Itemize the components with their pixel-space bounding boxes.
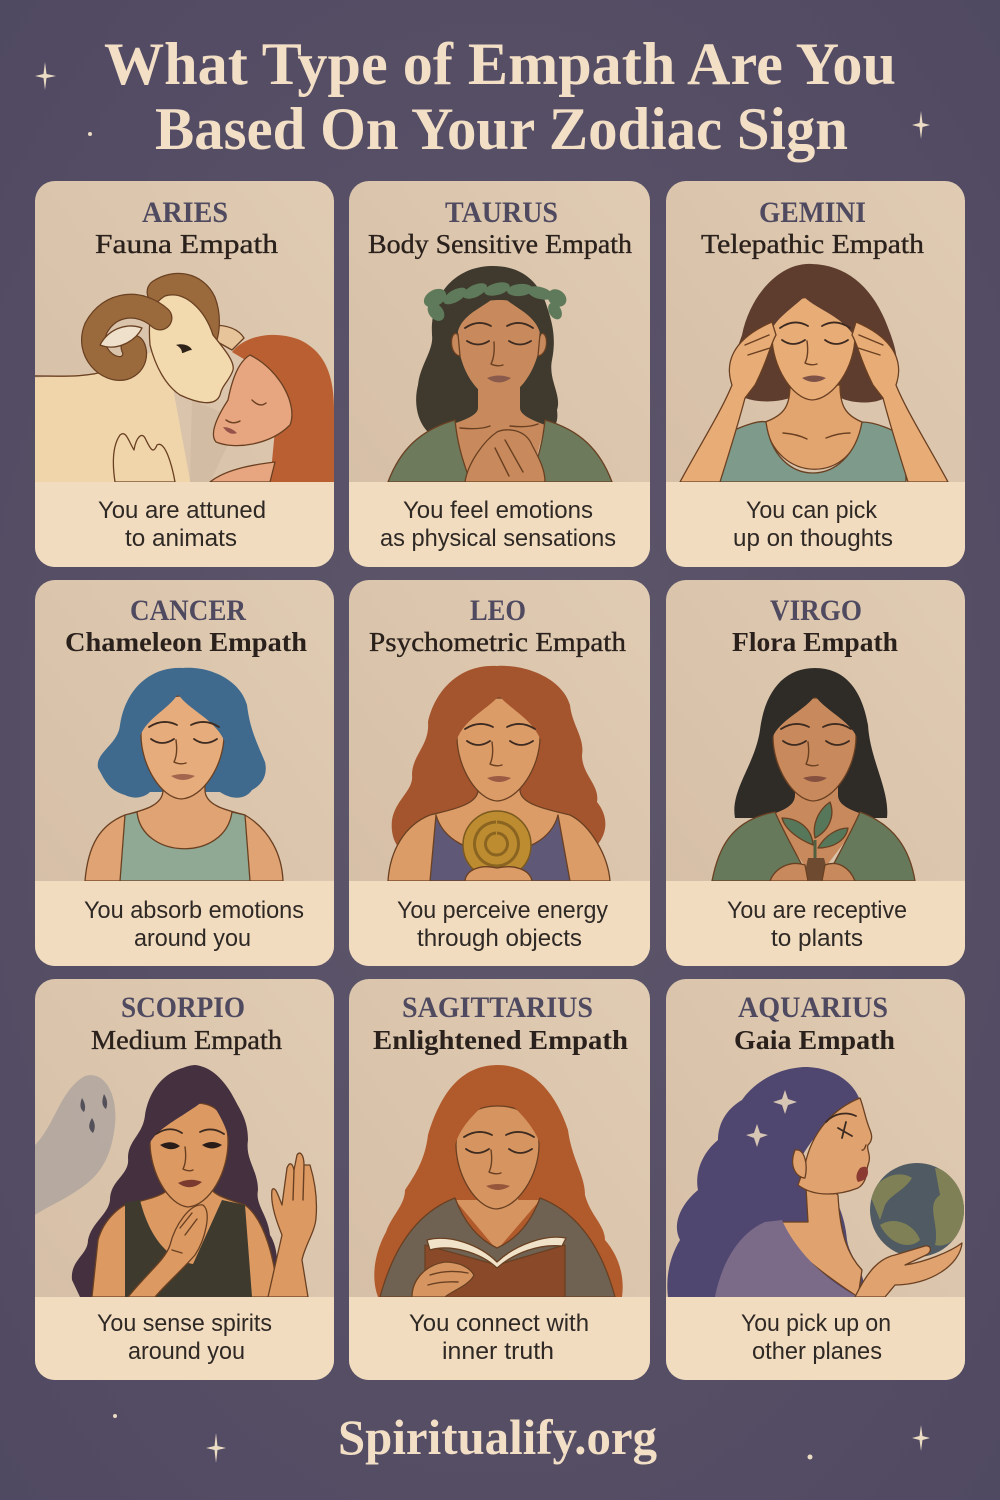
illustration: woman with wreath [388,266,612,482]
heading: Scorpio: SCORPIO [121,991,245,1024]
illustration: woman with globe [667,1067,966,1297]
caption: Taurus: You feel emotions [403,497,593,524]
heading: Taurus: TAURUS [445,196,558,229]
illustration: woman with blue hair [85,668,283,881]
caption: Cancer [84,897,304,952]
caption: Aquarius: You pick up on [741,1310,891,1337]
heading: Chameleon Empath: Chameleon Empath [65,627,307,657]
caption: Taurus: as physical sensations [380,525,616,552]
panel: Gemini [666,181,965,567]
caption: Virgo: You are receptive [727,897,907,924]
heading: Cancer: CANCER [130,594,246,627]
heading: Enlightened Empath: Enlightened Empath [373,1025,628,1055]
panel: Leo [349,580,650,966]
caption: Cancer: You absorb emotions [84,897,304,924]
title: Based On Your Zodiac Sign [155,96,848,162]
footer: site name: Spiritualify.org [338,1409,657,1465]
caption: Aries [98,497,266,552]
heading: Flora Empath: Flora Empath [732,627,898,657]
heading: Fauna Empath: Fauna Empath [95,229,279,259]
caption: Gemini: You can pick [746,497,878,524]
illustration: woman with ghost [35,1065,316,1297]
caption: Aquarius [741,1310,891,1365]
heading: Gemini: GEMINI [759,196,866,229]
panel: Aquarius [666,979,966,1380]
heading: Virgo: VIRGO [770,594,862,627]
caption: Gemini: up on thoughts [733,525,893,552]
caption: Aries: to animats [125,525,237,552]
heading: Aries: ARIES [142,196,228,229]
caption: Virgo [727,897,907,952]
caption: Aries: You are attuned [98,497,266,524]
illustration: woman touching temples [680,264,948,482]
panel: Aries [35,181,334,567]
panel: Scorpio [35,979,334,1380]
heading: Medium Empath: Medium Empath [91,1025,283,1055]
heading: Leo: LEO [470,594,526,627]
title: What Type of Empath Are You [104,31,896,97]
panel: Virgo [666,580,965,966]
caption: Scorpio [97,1310,272,1365]
caption: Gemini [733,497,893,552]
caption: Scorpio: You sense spirits [97,1310,272,1337]
caption: Leo [397,897,608,952]
panel: Sagittarius [349,979,650,1380]
caption: Cancer: around you [134,925,251,952]
panel: Cancer [35,580,334,966]
caption: Virgo: to plants [771,925,863,952]
illustration: woman holding plant [712,668,915,881]
heading: Body Sensitive Empath: Body Sensitive Empath [368,229,633,259]
heading: Gaia Empath: Gaia Empath [734,1025,895,1055]
title [104,31,896,162]
caption: Sagittarius: inner truth [442,1338,554,1365]
caption: Leo: You perceive energy [397,897,608,924]
illustration: woman reading book [374,1065,623,1297]
illustration: woman holding object [388,666,610,881]
caption: Aquarius: other planes [752,1338,882,1365]
heading: Aquarius: AQUARIUS [738,991,888,1024]
caption: Leo: through objects [417,925,582,952]
caption: Taurus [380,497,616,552]
panel: Taurus [349,181,650,567]
heading: Telepathic Empath: Telepathic Empath [701,229,925,259]
heading: Psychometric Empath: Psychometric Empath [369,627,627,657]
caption: Sagittarius [409,1310,589,1365]
heading: Sagittarius: SAGITTARIUS [402,991,593,1024]
caption: Scorpio: around you [128,1338,245,1365]
illustration: ram and woman [35,286,334,482]
caption: Sagittarius: You connect with [409,1310,589,1337]
